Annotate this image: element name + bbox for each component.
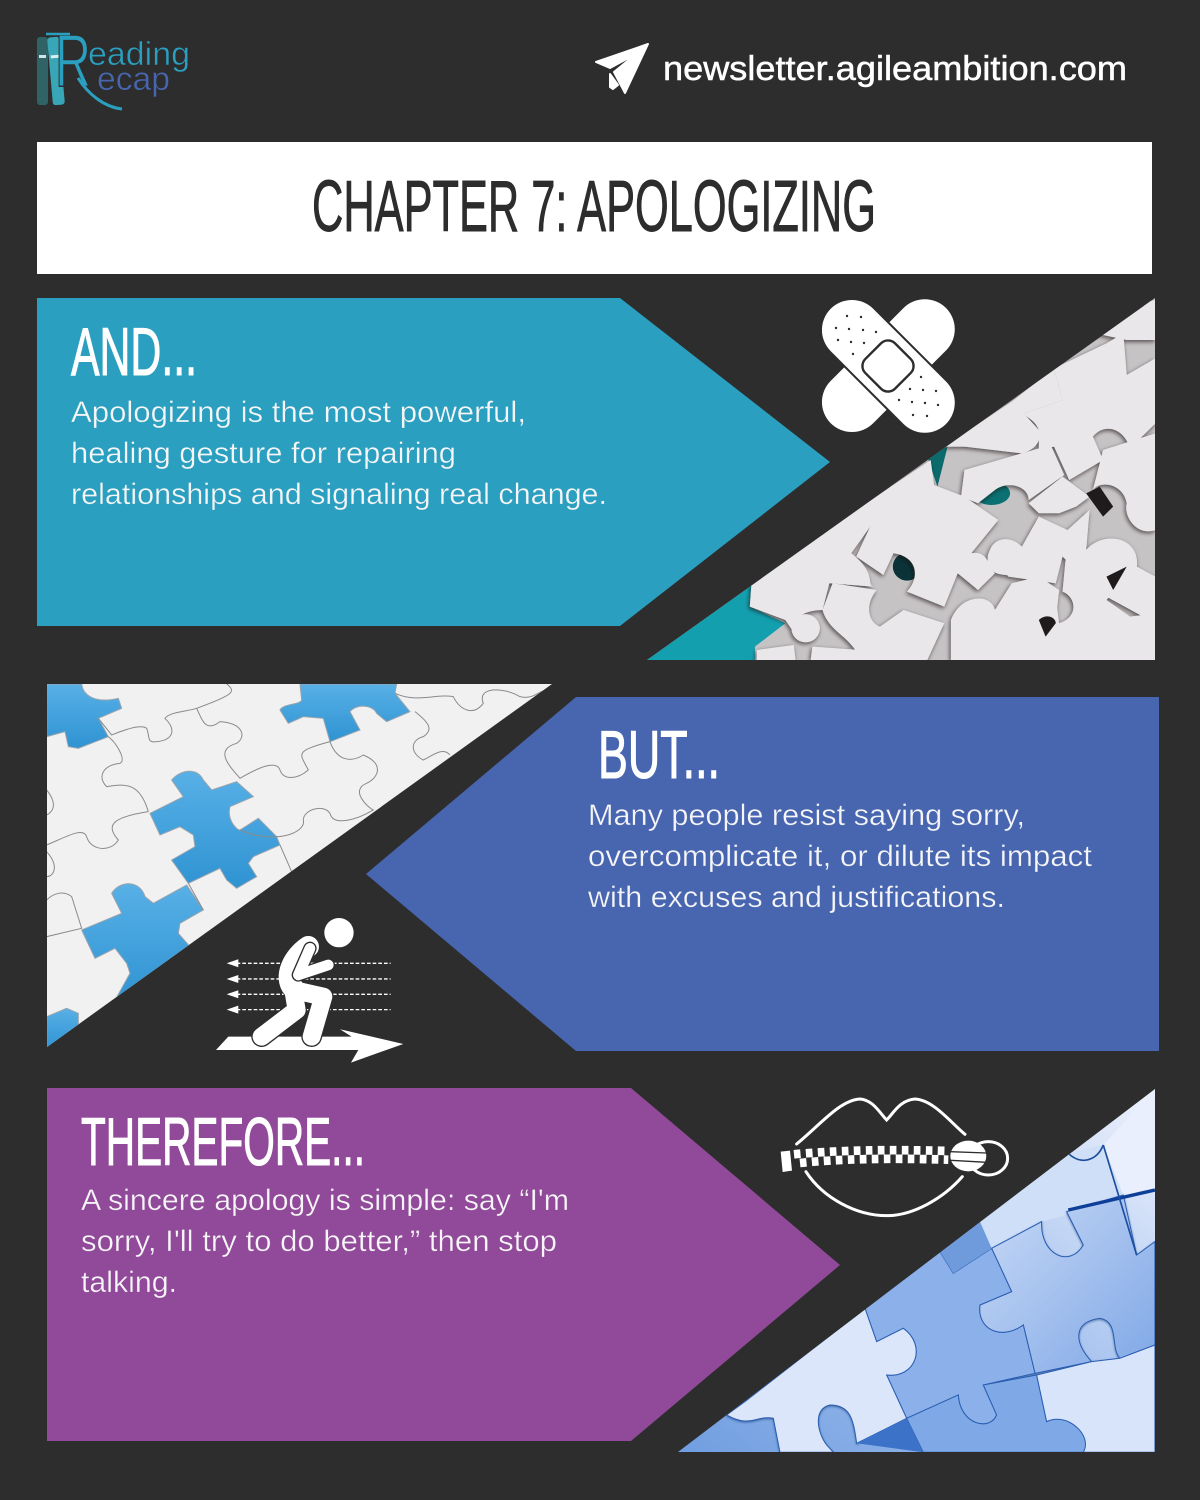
panel: BUT bbox=[366, 697, 1159, 1051]
logo: Reading Recap bbox=[37, 19, 190, 109]
icon: figure pushing against headwind bbox=[216, 918, 403, 1063]
body text: BUT: overcomplicate it, or dilute its impact bbox=[588, 840, 1092, 873]
newsletter URL: newsletter.agileambition.com bbox=[663, 50, 1127, 88]
logo: Reading Recap: eading bbox=[88, 35, 190, 72]
photo: blue embossed puzzle pieces bbox=[670, 1085, 1160, 1455]
icon: crossed bandages bbox=[807, 285, 970, 448]
title banner bbox=[37, 142, 1152, 274]
body text: THEREFORE: sorry, I'll try to do better,” then stop bbox=[81, 1225, 557, 1258]
icon: paper plane bbox=[596, 44, 648, 93]
body text: BUT: with excuses and justifications. bbox=[587, 881, 1005, 914]
body text: BUT bbox=[587, 799, 1092, 914]
logo: Reading Recap: R bbox=[55, 19, 91, 102]
photo: white jigsaw with blue gaps bbox=[40, 680, 560, 1055]
body text: THEREFORE: A sincere apology is simple: say “I'm bbox=[81, 1184, 569, 1217]
panel: AND bbox=[37, 298, 830, 626]
panel: THEREFORE bbox=[47, 1088, 840, 1441]
logo: Reading Recap: ecap bbox=[97, 60, 170, 97]
body text: AND: Apologizing is the most powerful, bbox=[71, 396, 526, 429]
heading: THEREFORE: THEREFORE... bbox=[81, 1104, 365, 1180]
body text: THEREFORE bbox=[81, 1184, 569, 1299]
body text: THEREFORE: talking. bbox=[81, 1266, 177, 1299]
icon: zipped lips bbox=[781, 1099, 1008, 1216]
heading: AND: AND... bbox=[71, 314, 197, 390]
body text: BUT: Many people resist saying sorry, bbox=[588, 799, 1025, 832]
body text: AND: healing gesture for repairing bbox=[71, 437, 456, 470]
body text: AND: relationships and signaling real change. bbox=[71, 478, 607, 511]
heading: BUT: BUT... bbox=[598, 717, 720, 793]
body text: AND bbox=[71, 396, 607, 511]
photo: scattered white puzzle pieces bbox=[640, 290, 1160, 665]
